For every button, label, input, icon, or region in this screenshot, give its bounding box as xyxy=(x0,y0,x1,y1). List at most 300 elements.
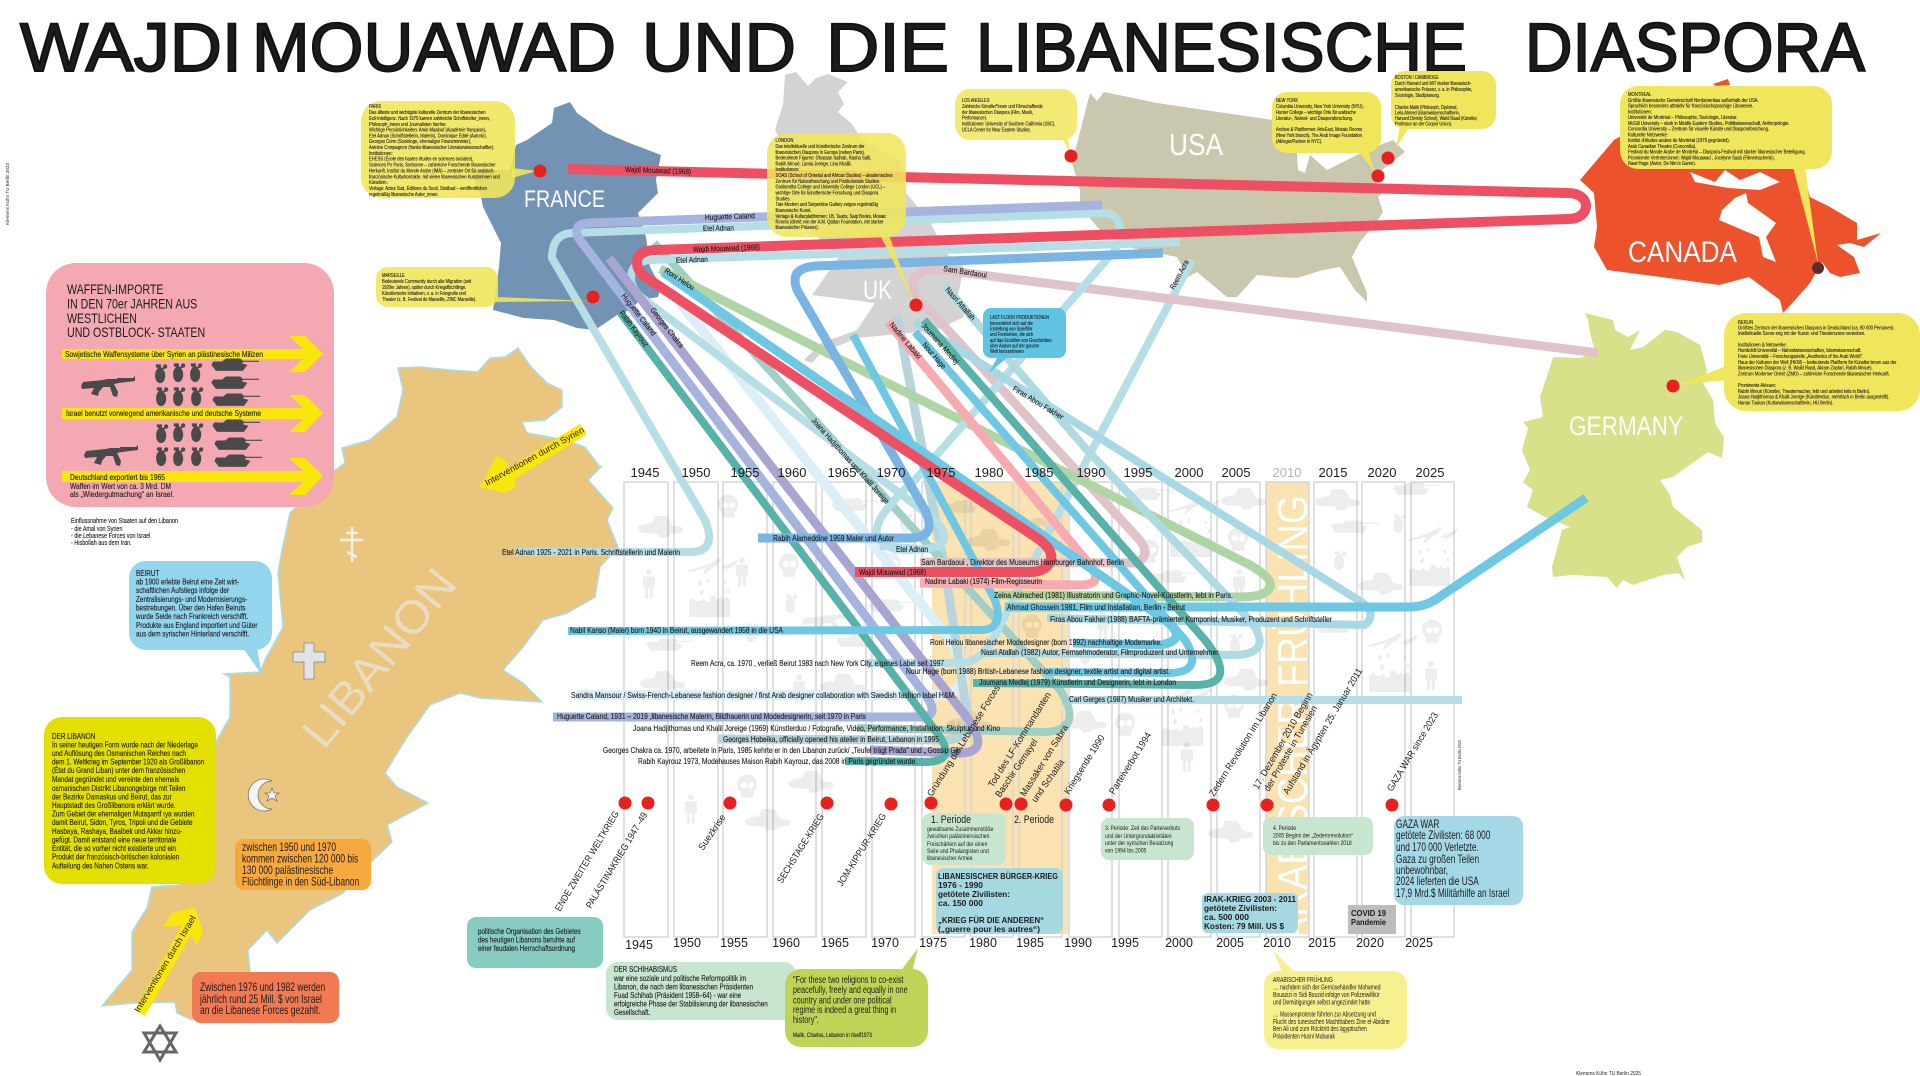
callout: Malik quote: history". xyxy=(793,1014,819,1025)
horizontal line labels: Zeina Abirached (1981) Illustratorin und Graphic-Novel-Künstlerin, lebt in Paris. xyxy=(994,591,1233,600)
arrow labels: als „Wiedergutmachung“ an Israel. xyxy=(70,489,174,499)
timeline years bottom: 1945 xyxy=(625,938,653,952)
timeline years bottom: 1975 xyxy=(919,936,947,950)
timeline years top: 1960 xyxy=(778,465,806,480)
callout: Malik quote: Malik, Charles, Lebanon in Itself1973 xyxy=(793,1032,872,1039)
callout: payments by Israel: an die Libanese Forces gezahlt. xyxy=(200,1005,321,1017)
city marker: New York: Literatur-, Nahost- und Diasporaforschung. xyxy=(1276,115,1353,122)
timeline event labels: Suezkrise xyxy=(696,813,728,853)
label: USA: USA xyxy=(1169,127,1223,162)
title: MOUAWAD xyxy=(252,9,616,86)
label: UK: UK xyxy=(863,275,892,305)
line: Huguette Caland xyxy=(553,205,1102,717)
line: Firas Abou Fakher xyxy=(915,322,1371,625)
horizontal line labels: Carl Gerges (1987) Musiker und Architekt. xyxy=(1069,695,1194,704)
timeline years top: 1945 xyxy=(631,465,659,480)
city marker: Paris: Georges Corm (Soziologe, ehemaliger Finanzminister), xyxy=(369,138,471,145)
callout: period 1: gewaltsame Zusammenstöße xyxy=(927,827,993,833)
callout: Beirut: bestrebungen. Über den Hafen Beiruts xyxy=(136,603,246,613)
city marker: Marseille xyxy=(376,267,600,307)
timeline years top: 2010 xyxy=(1273,465,1301,480)
city marker: Berlin: Hanan Toukan (Kulturwissenschaftlerin, HU Berlin). xyxy=(1738,400,1833,407)
timeline years top: 2005 xyxy=(1222,465,1250,480)
callout: Covid xyxy=(1348,905,1396,934)
line: Nadine Labaki xyxy=(888,322,1096,585)
map: Lebanon xyxy=(102,348,618,1020)
horizontal line labels: Sam Bardaoui , Direktor des Museums Hamburger Bahnhof, Berlin xyxy=(921,558,1124,567)
callout: payments by Israel: jährlich rund 25 Mill. $ von Israel xyxy=(199,994,322,1006)
city marker: Los Angeles: Zahlreiche Künstler*innen und Filmschaffende xyxy=(962,103,1043,110)
city marker: Montreal: Rawi Hage (Autor, De Niro's Game). xyxy=(1628,161,1696,167)
horizontal line labels: Nour Hage (born 1988) British-Lebanese fashion designer, textile artist and digital artist. xyxy=(906,667,1170,676)
callout: Arab spring: und Demütigungen selbst angezündet hatte xyxy=(1273,999,1371,1007)
callout: period 1: 1. Periode xyxy=(931,814,971,826)
callout: civil war: „KRIEG FÜR DIE ANDEREN“ xyxy=(938,915,1044,925)
timeline columns xyxy=(624,482,1454,937)
city marker: Montreal: Université de Montréal – Philosophie, Soziologie, Literatur. xyxy=(1628,115,1737,121)
diagonal line labels: Wajdi Mouawad (1968) xyxy=(693,243,760,254)
callout: period 4: bis zu den Parlamentswahlen 2018 xyxy=(1273,841,1352,847)
arab spring vertical heading: ARABISCHER FRÜHLING xyxy=(1269,495,1316,942)
icon: star xyxy=(265,788,279,801)
callout: civil war: getötete Zivilisten: xyxy=(938,889,1010,899)
title: DIASPORA xyxy=(1525,9,1865,86)
callout: Der Libanon: Zum Gebiet der ehemaligen Mutaşarrif ıya wurden xyxy=(52,809,194,819)
background war icons xyxy=(638,482,1458,843)
diagonal line labels: Roni Helou xyxy=(663,266,696,292)
timeline years bottom: 2000 xyxy=(1165,936,1193,950)
callout: period 1: Seite und Phalangisten und xyxy=(927,849,989,855)
credit: vertical left: Klemens Kühn TU Berlin 2023 xyxy=(5,162,10,225)
callout: Malik quote: country and under one political xyxy=(793,994,892,1006)
diagonal line labels: Nadine Labaki xyxy=(887,321,923,361)
city marker: Boston: BOSTON / CAMBRIDGE xyxy=(1395,74,1439,81)
timeline years bottom: 1965 xyxy=(821,936,849,950)
city marker: Paris: PARIS xyxy=(369,103,382,110)
callout: Covid: Pandemie xyxy=(1351,918,1387,927)
city marker: Los Angeles: Institutionen: University of Southern California (USC), xyxy=(962,121,1055,128)
callout: Malik quote: peacefully, freely and equally in one xyxy=(793,984,908,995)
city marker: Paris: Exil-Intelligenz. Nach 1975 kamen zahlreiche Schriftsteller_innen, xyxy=(369,115,490,122)
timeline years bottom: 2005 xyxy=(1216,936,1244,950)
callout: Covid: COVID 19 xyxy=(1351,909,1387,918)
callout: Beirut: ab 1900 erlebte Beirut eine Zeit wirt- xyxy=(136,577,240,587)
timeline event labels: GAZA WAR since 2023 xyxy=(1385,711,1441,794)
arrow labels: Israel benutzt vorwiegend amerikanische und deutsche Systeme xyxy=(66,408,261,418)
timeline years top: 1950 xyxy=(682,465,710,480)
timeline event labels: Kriegsende 1990 xyxy=(1062,733,1108,797)
callout: payments by Israel: Zwischen 1976 und 1982 werden xyxy=(200,982,325,994)
city marker: Boston: Professor an der Cooper Union). xyxy=(1395,121,1452,128)
callout: Beirut: wurde Seide nach Frankreich verschifft. xyxy=(135,611,248,621)
callout: Der Libanon: osmanischen Distrikt Libanongebirge mit Teilen xyxy=(52,783,185,793)
callout: Arab spring: .... Massenproteste führten zur Absetzung und xyxy=(1273,1011,1376,1019)
city marker: London: LONDON xyxy=(776,137,794,144)
callout: Palestinian refugees: kommen zwischen 120 000 bis xyxy=(242,853,358,866)
callout: Last Floor Produktionen: auf das Erzählen von Geschichten xyxy=(990,338,1052,343)
callout: Schihabismus: erfolgreiche Phase der Stabilisierung der libanesischen xyxy=(614,999,768,1009)
city marker: London xyxy=(767,133,922,312)
callout: period 4: 2005 Beginn der „Zedernrevolution“ xyxy=(1273,833,1353,840)
callout: Gaza war: unbewohnbar, xyxy=(1396,865,1448,877)
label: FRANCE: FRANCE xyxy=(524,186,605,213)
city marker: Berlin: Zentrum Moderner Orient (ZMO) – zahlreiche Forschende libanesischer Herkunft. xyxy=(1738,371,1890,378)
city marker: Berlin: Prominente Akteure: xyxy=(1738,383,1776,389)
city marker: Berlin: Größtes Zentrum der libanesischen Diaspora in Deutschland (ca. 80 000 Personen). xyxy=(1738,325,1895,332)
callout: Last Floor Produktionen: Welt konzentrieren xyxy=(990,349,1024,354)
timeline event labels: Baschir Gemayel xyxy=(993,737,1041,800)
callout: Last Floor Produktionen: LAST FLOOR PRODUKTIONEN xyxy=(990,315,1049,320)
city marker: Montreal: MONTREAL xyxy=(1628,92,1652,98)
callout: Iraq war: getötete Zivilisten: xyxy=(1204,903,1277,913)
icon: latin cross xyxy=(293,643,325,679)
timeline event labels: Tod des LF-Kommandanten xyxy=(986,690,1054,790)
line: Joumana Medlej xyxy=(924,320,1220,685)
title: DIE xyxy=(826,9,949,86)
callout: Schihabismus: war eine soziale und politische Reformpolitik im xyxy=(613,973,746,983)
callout: Der Libanon: Hauptstadt des Großlibanons erklärt wurde. xyxy=(52,800,176,810)
city marker: Marseille: Theater (z. B. Festival de Marseille, ZINC Marseille). xyxy=(382,296,476,303)
timeline event labels: Aufstand in Ägypten 25. Januar 2011 xyxy=(1281,667,1365,797)
city marker: London: libanesischer Präsenz). xyxy=(776,224,819,231)
line: Sam Bardaoui xyxy=(913,270,1598,563)
horizontal line labels: Joumana Medlej (1979) Künstlerin und Designerin, lebt in London xyxy=(979,678,1176,687)
city marker: Berlin: Joana Hadjithomas & Khalil Joreige (Künstlerduo, mehrfach in Berlin ausgestellt). xyxy=(1738,394,1889,401)
diagonal line labels: Joumana Medlej xyxy=(920,321,961,366)
timeline years top: 1990 xyxy=(1077,465,1105,480)
callout: Beirut: Zentralisierungs- und Modernisierungs- xyxy=(136,594,248,604)
line: Wajdi Mouawad xyxy=(568,169,1586,572)
text: influence of states: - Hisbollah aus dem Iran. xyxy=(71,539,132,547)
callout: Der Libanon: (État du Grand Liban) unter dem französischen xyxy=(52,765,185,775)
city marker: New York: NEW YORK xyxy=(1276,97,1299,104)
timeline years bottom: 1980 xyxy=(969,936,997,950)
text: influence of states: - die Lebanese Forces von Israel xyxy=(71,532,150,540)
callout: Der Libanon: In seiner heutigen Form wurde nach der Niederlage xyxy=(52,740,198,750)
line: Carl Gerges xyxy=(1069,696,1462,704)
city marker: London: Bedeutende Figuren: Ghassan Salhab, Rasha Salti, xyxy=(776,155,871,162)
callout: political organisation: politische Organisation des Gebietes xyxy=(478,926,581,936)
timeline years bottom: 2015 xyxy=(1308,936,1336,950)
city marker: Marseille: MARSEILLE xyxy=(382,272,405,279)
city marker: Paris: Etel Adnan (Schriftstellerin, Malerin), Dominique Eddé (Autorin), xyxy=(369,133,487,140)
line: Etel Adnan (Paris A) xyxy=(515,213,1105,552)
city marker: Montreal: Institut d'études arabes de Montréal (1979 gegründet). xyxy=(1628,138,1730,144)
callout: Iraq war: Kosten: 79 Mill. US $ xyxy=(1204,921,1284,931)
city marker: Boston: amerikanische Präsenz, v. a. in Philosophie, xyxy=(1395,86,1472,93)
panel: weapons imports xyxy=(46,263,334,507)
callout: Last Floor Produktionen xyxy=(983,308,1066,373)
timeline event labels: Zedern Revolution im Libanon xyxy=(1207,691,1280,799)
timeline years bottom: 2025 xyxy=(1405,936,1433,950)
heading: weapons imports: UND OSTBLOCK- STAATEN xyxy=(67,325,205,340)
horizontal line labels: Georges Chakra ca. 1970, arbeitete in Paris, 1985 kehrte er in den Libanon zurück/ „Teufel trägt Prada“ und „ Gossip Girl“ xyxy=(603,746,963,755)
callout: Schihabismus: DER SCHIHABISMUS xyxy=(614,964,677,974)
city marker: Paris: Wichtige Persönlichkeiten: Amin Maalouf (Académie française), xyxy=(369,127,486,134)
timeline years bottom: 2020 xyxy=(1356,936,1384,950)
horizontal line labels: Sandra Mansour / Swiss-French-Lebanese fashion designer / first Arab designer collaboration with Swedish fashion label H&M. xyxy=(571,691,956,700)
callout: Beirut xyxy=(129,561,272,675)
callout: Arab spring: Bouazizi in Sidi Bouzid infolge von Polizeiwillkür xyxy=(1273,991,1380,999)
line: Nour Hage xyxy=(915,332,1192,673)
horizontal line labels: Nabil Kanso (Maler) born 1940 in Beirut, ausgewandert 1958 in die USA xyxy=(570,626,784,635)
city marker: Marseille: Künstlerische Initiativen, v. a. in Fotografie und xyxy=(382,290,466,297)
horizontal line labels: Nadine Labaki (1974) Film-Regisseurin xyxy=(925,577,1042,586)
arrow: interventions by Syria: Interventionen durch Syrien xyxy=(483,425,586,488)
callout: Arab spring: Flucht des tunesischen Machthabers Zine el-Abidine xyxy=(1273,1018,1390,1026)
callout: Schihabismus: Fuad Schihab (Präsident 1958–64) - war eine xyxy=(614,990,741,1000)
callout: Der Libanon: DER LIBANON xyxy=(52,731,95,741)
callout: Der Libanon: damit Beirut, Sidon, Tyros, Tripoli und die Gebiete xyxy=(52,817,193,827)
callout: Malik quote xyxy=(785,948,928,1047)
arrow: interventions by Israel: Interventionen durch Israel xyxy=(132,914,198,1014)
city marker: London: libanesischen Diaspora in Europa (neben Paris). xyxy=(776,149,865,156)
city marker: Boston: Harvard Divinity School), Walid Raad (Künstler, xyxy=(1395,115,1478,122)
timeline years top: 2015 xyxy=(1319,465,1347,480)
diagonal line labels xyxy=(617,165,1191,506)
diagonal line labels: Etel Adnan xyxy=(676,255,708,265)
callout: Der Libanon: der Bezirke Damaskus und Beirut, das zur xyxy=(52,792,172,802)
city marker: Paris: Verlage: Actes Sud, Éditions du Seuil, Sindbad – veröffentlichen xyxy=(369,184,487,192)
heading: weapons imports: IN DEN 70er JAHREN AUS xyxy=(67,296,197,312)
timeline event labels: JOM-KIPPUR-KRIEG xyxy=(835,812,889,889)
city marker: London: Tate Modern und Serpentine Gallery zeigen regelmäßig xyxy=(776,201,878,208)
timeline years bottom: 1995 xyxy=(1111,936,1139,950)
diagonal line labels: Huguette Caland xyxy=(705,211,755,222)
timeline years top: 1955 xyxy=(731,465,759,480)
title: WAJDI xyxy=(20,9,242,86)
city marker: Berlin: Institutionen & Netzwerke: xyxy=(1738,342,1787,349)
diagonal line labels: Sam Bardaoui xyxy=(943,264,988,280)
line: Etel Adnan (Paris B) xyxy=(631,242,1180,549)
timeline years top xyxy=(631,465,1444,480)
timeline years top: 2000 xyxy=(1175,465,1203,480)
city marker: Montreal: Kulturelle Netzwerke: xyxy=(1628,132,1668,139)
timeline event labels: 17. Dezember 2010 Beginn xyxy=(1251,691,1316,792)
callout: Iraq war xyxy=(1202,893,1298,933)
city marker: Berlin xyxy=(1666,313,1920,411)
label: GERMANY: GERMANY xyxy=(1569,411,1683,441)
timeline years bottom: 1990 xyxy=(1064,936,1092,950)
icon: star of David xyxy=(144,1026,176,1060)
timeline years bottom: 1960 xyxy=(772,936,800,950)
city marker: Paris: regelmäßig libanesische Autor_innen. xyxy=(369,191,439,198)
callout: Beirut: schaftlichen Aufstiegs infolge der xyxy=(136,585,230,595)
callout: political organisation: des heutigen Libanons beruhte auf xyxy=(478,935,575,945)
callout: Der Libanon: Entität, die so vorher nicht existierte und ein xyxy=(52,843,176,853)
title: UND xyxy=(642,9,796,86)
map: USA xyxy=(1072,92,1405,302)
timeline years bottom: 1985 xyxy=(1016,936,1044,950)
city marker: Montreal xyxy=(1620,86,1832,274)
timeline years bottom: 1970 xyxy=(871,936,899,950)
callout: Palestinian refugees: zwischen 1950 und 1970 xyxy=(242,842,336,854)
diagonal line labels: Wajdi Mouawad (1968) xyxy=(625,165,692,176)
line: Georges Chakra xyxy=(609,258,978,753)
city marker: Marseille: Bedeutende Community durch alte Migration (seit xyxy=(382,278,472,285)
text: influence of states xyxy=(71,517,178,547)
callout: Der Libanon: und Auflösung des Osmanischen Reiches nach xyxy=(52,748,186,758)
callout: Der Libanon: Hasbaya, Rashaya, Baalbek und Akkar hinzu- xyxy=(52,826,183,836)
timeline event labels: ENDE ZWEITER WELTKRIEG xyxy=(553,809,622,914)
city marker: Berlin: Haus der Kulturen der Welt (HKW) – bedeutende Plattform für Künstler:innen aus der xyxy=(1738,360,1897,366)
callout: Last Floor Produktionen: und Fernsehen, die sich xyxy=(990,332,1034,337)
callout: Der Libanon: gefügt. Damit entstand eine neue territoriale xyxy=(52,835,176,845)
callout: Gaza war: 2024 lieferten die USA xyxy=(1396,876,1479,888)
arrow labels: Waffen im Wert von ca. 3 Mrd. DM xyxy=(70,481,171,491)
callout: Der Libanon: Produkt der französisch-britischen kolonialen xyxy=(52,852,179,862)
city marker: New York: (New York branch), The Arab Image Foundation xyxy=(1276,132,1362,139)
callout: Palestinian refugees: 130 000 palästinesische xyxy=(242,865,334,877)
diagonal line labels: Joana Hadjithomas und Khalil Joreige xyxy=(810,416,891,506)
callout: payments by Israel xyxy=(192,972,339,1023)
city marker: New York: Archive & Plattformen: ArteEast, Mosaic Rooms xyxy=(1276,126,1362,133)
timeline event labels: SECHSTAGE-KRIEG xyxy=(775,812,827,886)
callout: period 1: zwischen palästinensischen xyxy=(927,834,989,840)
diagonal line labels: Rabih Kayrouz xyxy=(617,309,651,349)
title xyxy=(20,9,1865,86)
callout: civil war: LIBANESISCHER BÜRGER-KRIEG xyxy=(938,871,1058,881)
callout: Palestinian refugees: Flüchtlinge in den Süd-Libanon xyxy=(242,876,359,889)
timeline years top: 2025 xyxy=(1416,465,1444,480)
city marker: New York: Columbia University, New York University (NYU), xyxy=(1276,103,1364,110)
horizontal line labels: Roni Helou libanesischer Modedesigner (born 1992) nachhaltige Modemarke. xyxy=(930,638,1162,647)
timeline event dots xyxy=(618,796,1398,812)
callout: Der Libanon: Mandat gegründet und vereinte den ehemals xyxy=(52,774,180,784)
city marker: Paris: Herkunft. Institut du Monde Arabe (IMA) – zentraler Ort für arabisch- xyxy=(369,168,495,175)
callout: Der Libanon: Aufteilung des Nahen Ostens war. xyxy=(52,861,149,871)
callout: civil war: („guerre pour les autres“) xyxy=(938,924,1040,934)
city marker: Montreal: Institutionen: xyxy=(1628,109,1652,116)
map: UK xyxy=(775,72,964,363)
callout: civil war: 1976 - 1990 xyxy=(938,880,983,890)
horizontal line labels: Georges Hobeika, officially opened his atelier in Beirut, Lebanon in 1995 xyxy=(723,735,940,744)
city marker: Boston: Soziologie, Stadtplanung. xyxy=(1395,92,1440,99)
horizontal line labels: Rabih Kayrouz 1973, Modehauses Maison Rabih Kayrouz, das 2008 in Paris gegründet wurde. xyxy=(638,757,917,766)
city marker: Paris: Künstlern. xyxy=(369,179,388,186)
callout: period 1: libanesischer Armee xyxy=(927,856,973,862)
city marker: New York: Hunter College – wichtige Orte für arabische xyxy=(1276,109,1356,116)
callout: period 3 xyxy=(1101,818,1194,860)
city marker: Los Angeles: der libanesischen Diaspora (Film, Musik, xyxy=(962,109,1033,116)
arrow labels xyxy=(65,349,263,499)
line: Reem Acra xyxy=(867,260,1192,663)
city marker: Montreal: Festival du Monde Arabe de Montréal – Diaspora-Festival mit starker libanesischer Beteiligung. xyxy=(1628,149,1806,156)
callout: political organisation: einer feudalen Herrschaftsordnung xyxy=(478,943,575,953)
city marker: Marseille: 1920er Jahren), später durch Kriegsflüchtlinge. xyxy=(382,284,466,291)
icon: orthodox cross xyxy=(340,527,363,562)
city marker: Montreal: Prominente Vertreter:innen: Wajdi Mouawad , Jocelyne Saab (Filmemacherin). xyxy=(1628,155,1775,162)
callout: period 4 xyxy=(1263,817,1373,855)
line: Ahmad Ghossein xyxy=(1005,498,1586,607)
timeline years top: 1965 xyxy=(828,465,856,480)
timeline event labels: Massaker von Sabra xyxy=(1018,723,1071,799)
city marker: London: Rabih Mroué, Lamia Joreige, Lina Khalili. xyxy=(776,161,852,168)
city marker: London: Goldsmiths College und University College London (UCL) – xyxy=(776,184,886,191)
horizontal line labels: Ahmad Ghossein 1981, Film und Installation, Berlin - Beirut xyxy=(1007,603,1186,612)
heading: weapons imports: WESTLICHEN xyxy=(67,311,137,326)
credit: vertical right: Klemens Kühn TU Berlin 2023 xyxy=(1457,740,1462,790)
text: influence of states: Einflussnahme von Staaten auf den Libanon xyxy=(71,517,178,525)
timeline event labels: Gründung der Lebanese Forces xyxy=(925,683,1003,799)
diagonal line labels: Etel Adnan xyxy=(703,223,734,233)
icons: weapons row 1 xyxy=(81,358,260,406)
city marker: Paris: Antoine Compagnon (franko-libanesischer Literaturwissenschaftler). xyxy=(369,144,494,151)
city marker: Montreal: Sprachlich besonders attraktiv für französischsprachige Libanesen. xyxy=(1628,103,1753,110)
diagonal line labels: Nour Hage xyxy=(920,341,948,371)
city marker: Los Angeles: UCLA Center for Near Eastern Studies. xyxy=(962,127,1031,134)
city marker: New York: (Ableger/Partner in NYC). xyxy=(1276,138,1322,145)
callout: civil war xyxy=(936,868,1063,934)
line: Etel Adnan (loop) xyxy=(877,213,1120,550)
timeline years top: 1985 xyxy=(1025,465,1053,480)
migration lines xyxy=(515,169,1598,762)
city marker: London: Das intellektuelle und künstlerische Zentrum der xyxy=(776,143,865,150)
diagonal line labels: Georges Chakra xyxy=(648,306,686,350)
callout: Iraq war: IRAK-KRIEG 2003 - 2011 xyxy=(1204,894,1296,904)
callout: Schihabismus: Gesellschaft. xyxy=(614,1007,650,1017)
horizontal line labels xyxy=(502,534,1332,766)
line: Rabih Alameddine xyxy=(758,253,1163,538)
callout: period 1: Freischärlern auf der einen xyxy=(927,842,987,848)
city marker: Boston: Durch Harvard und MIT starker libanesisch- xyxy=(1395,80,1472,87)
city marker: Berlin: libanesischen Diaspora (z. B. Walid Raad, Akram Zaatari, Rabih Mroué). xyxy=(1738,365,1873,372)
icon: crescent xyxy=(248,779,272,811)
line: Rabih Kayrouz xyxy=(620,312,945,762)
callout: Last Floor Produktionen: Erstellung von Spielfilm xyxy=(990,326,1032,332)
horizontal line labels: Reem Acra, ca. 1970 , verließ Beirut 1983 nach New York City, eigenes Label seit 1997 xyxy=(691,659,944,668)
callout: Gaza war xyxy=(1394,816,1523,905)
city marker: Paris: Sciences Po Paris, Sorbonne – zahlreiche Forschende libanesischer xyxy=(369,162,496,169)
callout: period 3: und der Untergrundaktivitäten xyxy=(1105,834,1172,840)
city marker: Boston: Charles Malik (Philosoph, Diplomat, xyxy=(1395,104,1458,111)
callout: period 3: von 1994 bis 2005 xyxy=(1105,848,1146,855)
line: Joana Hadjithomas xyxy=(654,243,1070,732)
horizontal line labels: Nasri Atallah (1982) Autor, Fernsehmoderator, Filmproduzent und Unternehmer. xyxy=(981,648,1220,657)
timeline event labels: und Schatila xyxy=(1029,757,1068,805)
city marker: New York xyxy=(1272,92,1384,182)
city marker: London: libanesische Kunst. xyxy=(776,207,811,214)
city marker: Los Angeles xyxy=(955,89,1078,162)
horizontal line labels: Rabih Alameddine 1959 Maler und Autor xyxy=(773,534,894,543)
city marker: London: SOAS (School of Oriental and African Studies) – akademisches xyxy=(776,172,893,179)
callout: civil war: ca. 150 000 xyxy=(938,898,983,908)
city marker: London: Institutionen: xyxy=(776,166,799,173)
callout: Beirut: aus dem syrischen Hinterland verschifft. xyxy=(136,629,249,639)
callout: political organisation xyxy=(467,917,603,968)
callout: period 1 xyxy=(922,813,1006,865)
city marker: Berlin: Humboldt-Universität – Nahostwissenschaften, Islamwissenschaft. xyxy=(1738,348,1861,354)
map: France xyxy=(470,102,661,330)
callout: Arab spring: Präsidenten Husni Mubarak xyxy=(1273,1033,1336,1041)
callout: Arab spring xyxy=(1264,950,1407,1049)
timeline event labels: PALÄSTINAKRIEG 1947 -49 xyxy=(584,811,650,911)
callout: Gaza war: und 170 000 Verletzte. xyxy=(1396,842,1479,854)
callout: Schihabismus: Libanon, die nach dem libanesischen Präsidenten xyxy=(614,982,753,992)
callout: period 3: 3. Periode: Zeit des Parteiverbots xyxy=(1105,826,1180,832)
city marker: Montreal: Größte libanesische Gemeinschaft Nordamerikas außerhalb der USA. xyxy=(1628,98,1759,104)
callout: Palestinian refugees xyxy=(235,839,371,890)
timeline years top: 1975 xyxy=(927,465,955,480)
callout: Gaza war: getötete Zivilisten: 68 000 xyxy=(1396,830,1491,842)
city marker: Berlin: Intellektuelle Szene eng mit der Kunst- und Theaterszene verwoben. xyxy=(1738,331,1865,337)
horizontal line labels: Huguette Caland, 1931 – 2019 ,libanesische Malerin, Bildhauerin und Modedesignerin, seit 1970 in Paris xyxy=(557,712,866,721)
diagonal line labels: Huguette Caland xyxy=(619,292,658,337)
callout: Beirut: BEIRUT xyxy=(136,568,160,578)
city marker: Paris: französische Kulturkontakte, mit vielen libanesischen Kuratorinnen und xyxy=(369,174,500,181)
line: Zeina Abirached xyxy=(660,269,1270,597)
city marker: Montreal: Arab Canadian Theatre (Concordia). xyxy=(1628,144,1696,150)
